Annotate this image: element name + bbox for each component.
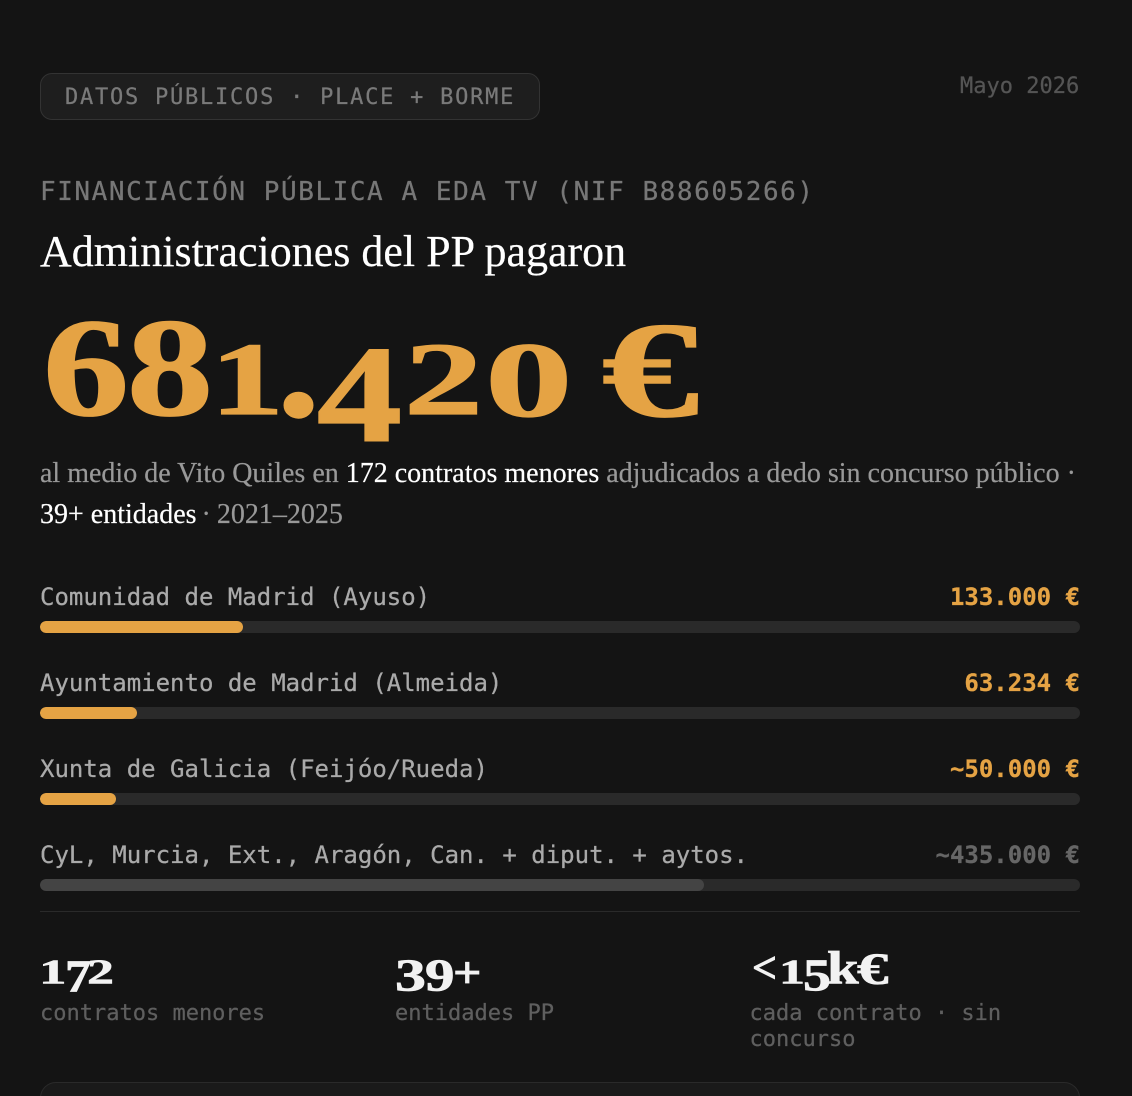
value: 63.234 € [964,668,1080,696]
date: Mayo 2026 [960,74,1079,98]
stat: 15k value: 1 [779,953,805,991]
headline amount: 6 [42,290,128,446]
headline amount: 1 [210,322,284,437]
stat: 39+ caption: entidades PP [395,1001,554,1026]
stat: 172 value: 2 [86,953,114,991]
bar row: Ayuntamiento de Madrid [40,668,1080,719]
stat: 39+ value: 3 [395,949,426,1000]
bar [40,621,1080,633]
stat: 39+ value: 9 [424,949,454,1000]
bar [40,793,1080,805]
bar row: Comunidad de Madrid [40,582,1080,633]
label: Ayuntamiento de Madrid (Almeida) [40,668,502,696]
stat: 172 value: 1 [39,953,67,991]
value: 133.000 € [950,582,1080,610]
stat: 15k value: < [752,944,777,992]
label: Xunta de Galicia (Feijóo/Rueda) [40,754,488,782]
badge: data sources: DATOS PÚBLICOS · PLACE + BORME [65,85,515,110]
bottom panel [40,1082,1080,1096]
bar [40,707,1080,719]
stat: 15k caption: concurso [750,1026,855,1052]
stat: 172 value: 7 [64,951,90,1002]
label: Comunidad de Madrid (Ayuso) [40,582,430,610]
subtitle [40,458,1076,530]
headline amount: 2 [404,322,483,437]
label: CyL, Murcia, Ext., Aragón, Can. + diput. + aytos. [40,840,748,868]
headline amount: € [602,295,698,446]
stat: 15k value: k [826,942,858,994]
subtitle: 39+ entidades · 2021–2025 [40,498,343,530]
stat: 15k caption: cada contrato · sin [750,1001,1001,1026]
headline amount: 8 [127,290,213,446]
main heading: Administraciones del PP pagaron [40,227,626,276]
value: ~435.000 € [936,840,1080,868]
headline amount: 0 [485,321,572,439]
stat: 39+ value: + [453,948,481,997]
subtitle: al medio de Vito Quiles en 172 contratos menores adjudicados a dedo sin concurso público · [40,458,1076,488]
headline amount: 4 [316,317,402,471]
stat: 172 caption: contratos menores [40,1001,265,1026]
bar [40,879,1080,891]
bar row: Xunta de Galicia [40,754,1080,805]
headline amount: . [276,278,320,450]
badge: data sources [40,73,540,120]
stat: 15k caption [750,1001,1001,1052]
stat: 15k value: 5 [802,949,830,1001]
eyebrow heading: FINANCIACIÓN PÚBLICA A EDA TV (NIF B88605266) [40,176,815,206]
value: ~50.000 € [950,754,1080,782]
stat: 15k value: € [856,945,888,993]
